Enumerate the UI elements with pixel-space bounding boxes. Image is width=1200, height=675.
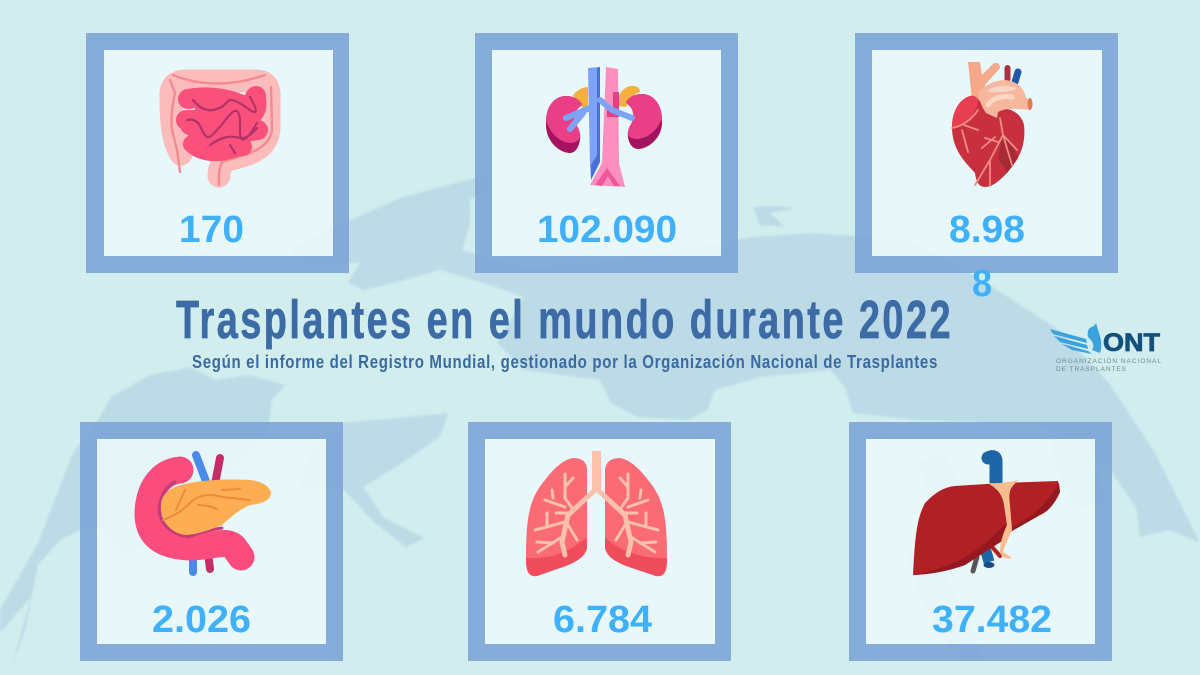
- logo wordmark: ONT: [1103, 329, 1160, 357]
- icon: kidneys: [546, 67, 662, 187]
- panel: liver: [849, 422, 1112, 661]
- value: pancreas: 2.026: [152, 599, 251, 641]
- logo mark wing: [1050, 323, 1101, 354]
- logo caption line 1: ORGANIZACIÓN NACIONAL: [1056, 356, 1161, 365]
- panel frame: [475, 33, 738, 273]
- icon: lungs: [526, 451, 667, 576]
- panel: lungs: [468, 422, 731, 661]
- panel: pancreas: [80, 422, 343, 661]
- value: lungs: 6.784: [553, 599, 652, 641]
- panel frame: [855, 33, 1118, 273]
- icon: liver: [913, 457, 1060, 575]
- icon: heart: [952, 62, 1032, 187]
- panel interior: [104, 50, 333, 256]
- panel frame: [849, 422, 1112, 661]
- panel: intestine: [86, 33, 349, 273]
- value: liver: 37.482: [932, 599, 1052, 641]
- panel interior: [97, 439, 326, 644]
- panel frame: [80, 422, 343, 661]
- icon: pancreas: [148, 455, 271, 572]
- value: heart wrapped digit: 8: [972, 263, 992, 305]
- panel: kidney: [475, 33, 738, 273]
- subtitle: Según el informe del Registro Mundial, gestionado por la Organización Nacional de Trasplantes: [192, 352, 938, 372]
- panel frame: [86, 33, 349, 273]
- value: kidney: 102.090: [537, 209, 677, 251]
- value: heart: 8.98: [949, 209, 1025, 251]
- panel interior: [866, 439, 1095, 644]
- panel interior: [485, 439, 715, 644]
- value: intestine: 170: [179, 209, 244, 251]
- logo: ONT: [1050, 323, 1161, 373]
- logo caption line 2: DE TRASPLANTES: [1056, 366, 1127, 373]
- icon: intestine: [170, 75, 272, 185]
- panel frame: [468, 422, 731, 661]
- panel interior: [872, 50, 1102, 256]
- panel interior: [492, 50, 721, 256]
- background world globe map: [0, 174, 1200, 670]
- panel: heart: [855, 33, 1118, 305]
